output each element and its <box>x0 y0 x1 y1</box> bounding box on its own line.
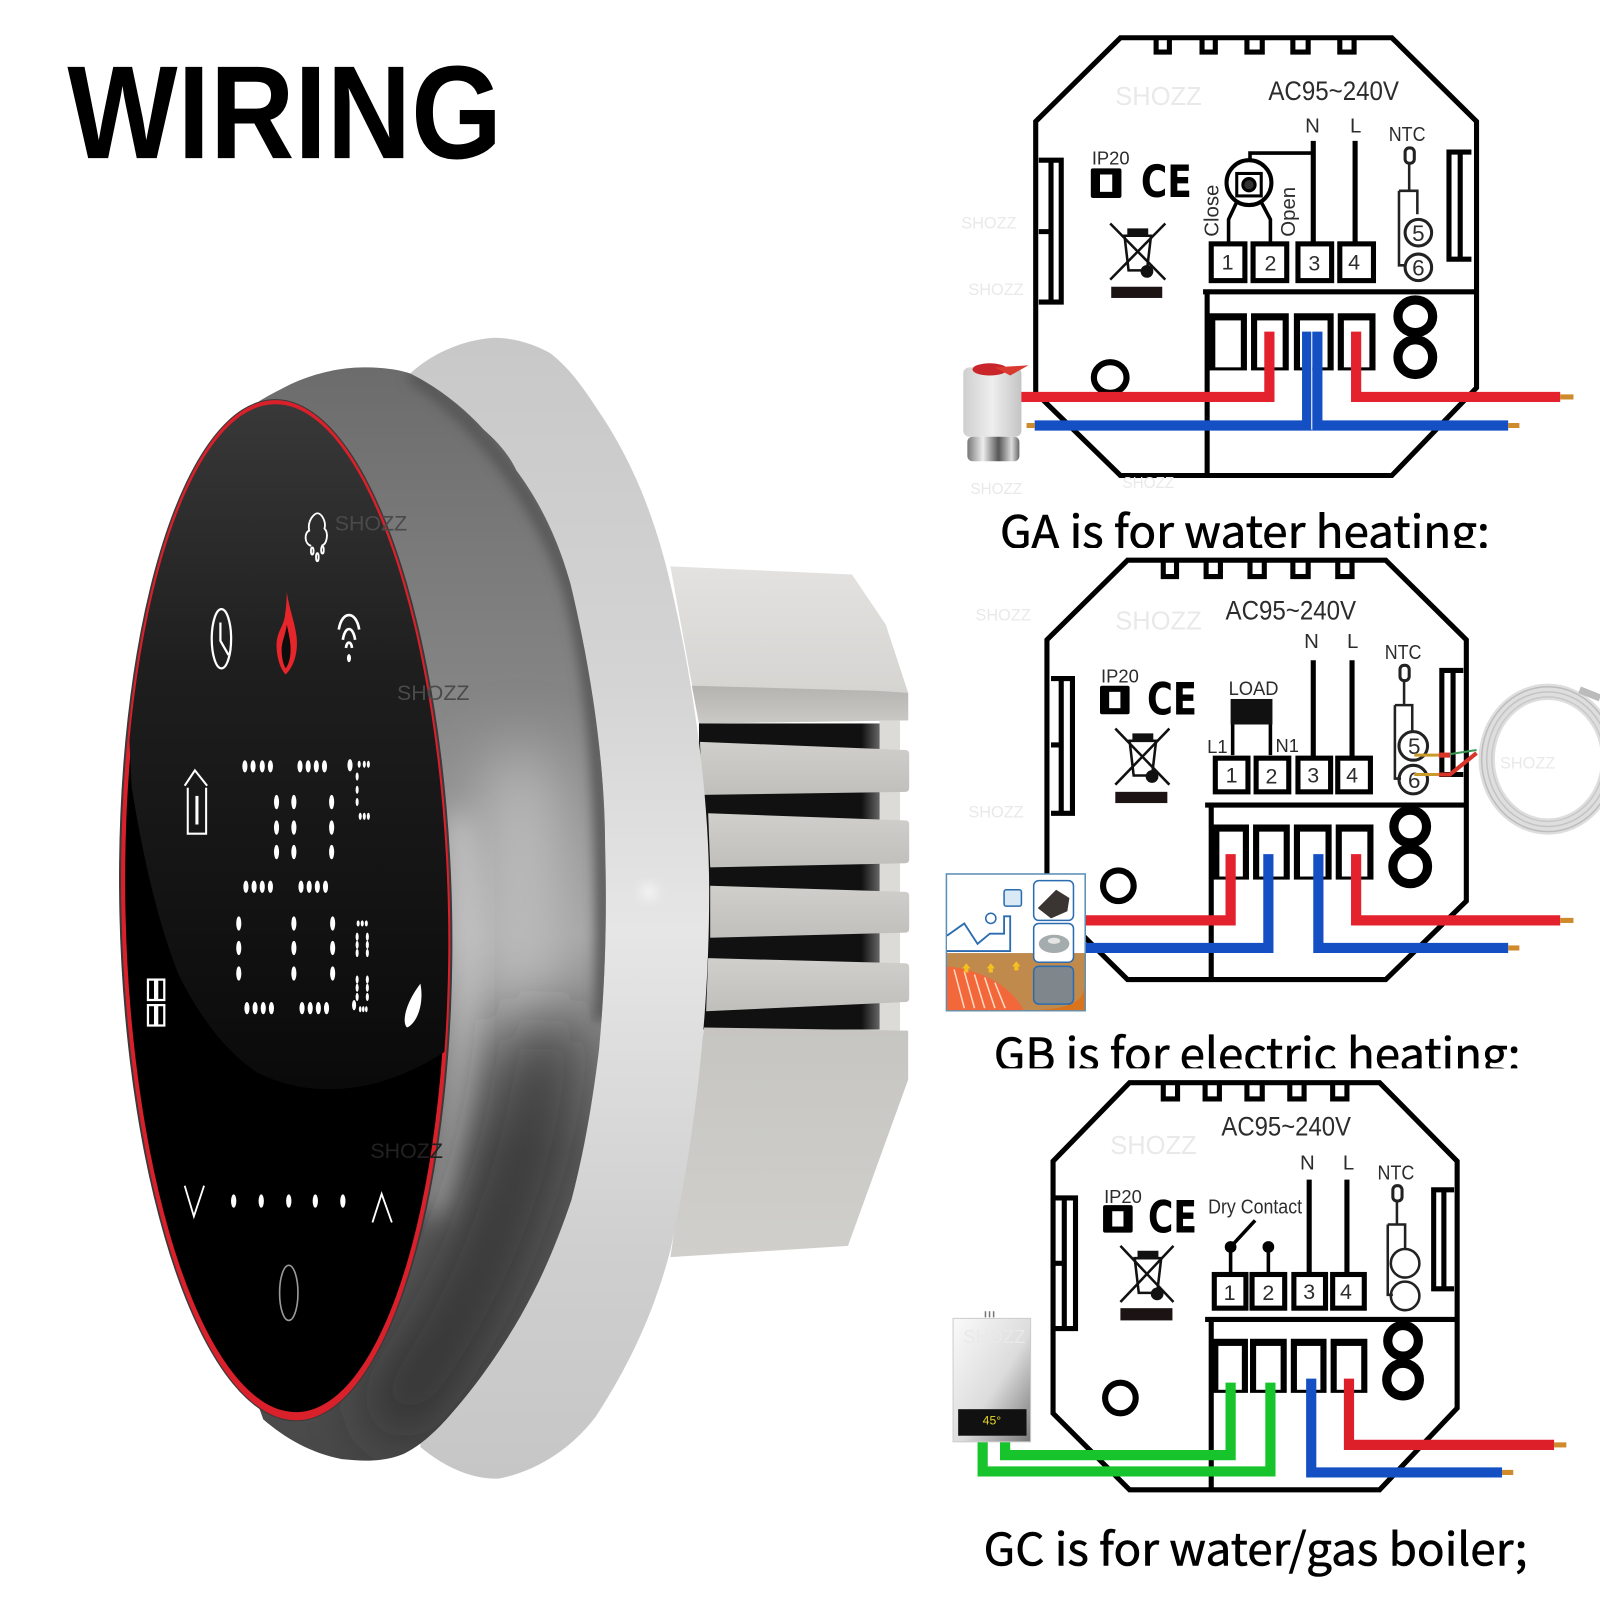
boiler <box>953 1311 1031 1442</box>
disposal bar <box>1120 1308 1172 1320</box>
disposal bar <box>1115 792 1167 803</box>
icon: home thermometer <box>185 770 207 834</box>
wiring diagram: GB electric heating <box>946 560 1600 1011</box>
left clip <box>1055 1198 1076 1329</box>
icon: WEEE bin <box>1120 1246 1173 1302</box>
double circle ports <box>1398 300 1433 374</box>
N L NTC labels <box>1305 116 1426 146</box>
double circle ports <box>1393 810 1428 884</box>
CE mark: CE <box>1148 1191 1197 1244</box>
board outline <box>1036 38 1477 476</box>
N L NTC labels: L <box>1347 631 1358 653</box>
L1 and N1 labels <box>1207 735 1299 757</box>
voltage label: AC95~240V <box>1221 1112 1351 1142</box>
CE mark: CE <box>1147 672 1197 725</box>
wires <box>983 1379 1566 1472</box>
left clip <box>1039 160 1061 302</box>
wiring diagram: GA water heating <box>961 38 1573 498</box>
N L NTC labels <box>1304 631 1421 664</box>
N L NTC labels: NTC <box>1378 1163 1414 1185</box>
board watermarks: SHOZZ <box>976 606 1031 624</box>
IP20 mark <box>1091 147 1130 198</box>
IP20 mark: IP20 <box>1101 666 1139 687</box>
icon: WEEE bin <box>1115 729 1169 785</box>
board watermarks <box>963 1132 1197 1347</box>
board watermarks <box>961 83 1202 498</box>
temperature digits <box>236 759 370 1014</box>
watermarks on device: SHOZZ <box>335 512 407 536</box>
wires <box>1019 327 1573 430</box>
mounting tabs <box>1163 562 1352 577</box>
N and L leads <box>1313 660 1352 756</box>
mounting hole <box>1094 362 1127 393</box>
control arrows and slider dots <box>185 1186 392 1222</box>
N L NTC labels: NTC <box>1389 124 1426 146</box>
board outline <box>1053 1083 1457 1490</box>
partition lines <box>1203 292 1477 476</box>
board watermarks: SHOZZ <box>1115 608 1202 636</box>
right clip <box>1449 152 1471 259</box>
boiler: 45° <box>983 1413 1001 1427</box>
mounting tabs <box>1163 1085 1347 1099</box>
probe numbers: 6 <box>1408 768 1421 793</box>
numbered terminals: 4 <box>1348 250 1360 274</box>
partition lines <box>1205 805 1465 980</box>
L1 and N1 labels: L1 <box>1207 736 1228 757</box>
probe numbers: 5 <box>1412 221 1425 246</box>
numbered terminals: 3 <box>1308 251 1320 275</box>
load label and element <box>1229 678 1279 755</box>
caption GC: GC is for water/gas boiler; <box>984 1513 1528 1578</box>
numbered terminals <box>1215 758 1370 792</box>
N L NTC labels: NTC <box>1385 642 1421 664</box>
mounting tabs <box>1156 40 1354 52</box>
icon: wifi <box>339 615 359 662</box>
caption GA: GA is for water heating: <box>1000 496 1490 561</box>
floor heating picture <box>946 874 1085 1011</box>
watermarks on device <box>335 512 469 1163</box>
board watermarks: SHOZZ <box>1115 83 1202 111</box>
icon: WEEE bin <box>1110 223 1165 280</box>
icon: cloud <box>306 513 327 561</box>
N L NTC labels: L <box>1343 1152 1354 1174</box>
NTC probe <box>1388 1186 1419 1310</box>
dry contact switch <box>1227 1220 1272 1273</box>
screw terminals <box>1212 1339 1367 1393</box>
white mounting flange <box>410 338 709 1479</box>
Dry Contact label: Dry Contact <box>1208 1196 1302 1218</box>
rear housing block <box>670 566 909 1257</box>
right clip <box>1434 1190 1454 1289</box>
caption GB: GB is for electric heating: <box>994 1018 1520 1083</box>
numbered terminals: 3 <box>1307 764 1319 788</box>
watermarks on device: SHOZZ <box>370 1139 443 1163</box>
L1 and N1 labels: N1 <box>1276 735 1299 756</box>
N and L leads <box>1309 1180 1347 1273</box>
N L NTC labels: L <box>1350 116 1361 138</box>
wires <box>1086 854 1573 948</box>
board watermarks: SHOZZ <box>968 803 1024 821</box>
partition lines <box>1205 1319 1457 1490</box>
icon: flame <box>277 592 297 674</box>
mounting hole <box>1105 1383 1136 1413</box>
double circle ports <box>1387 1326 1419 1396</box>
numbered terminals: 2 <box>1265 765 1277 789</box>
Close and Open labels: Open <box>1278 187 1300 237</box>
valve symbol <box>1227 153 1313 243</box>
IP20 mark <box>1100 666 1139 714</box>
probe numbers: 6 <box>1412 256 1425 281</box>
CE mark: CE <box>1141 155 1192 208</box>
numbered terminals: 1 <box>1224 1281 1236 1305</box>
NTC probe <box>1399 148 1432 281</box>
board watermarks <box>968 606 1555 821</box>
Close and Open labels: Close <box>1201 185 1223 237</box>
icon: eco leaf <box>405 984 421 1028</box>
icon: clock <box>212 609 231 668</box>
left clip <box>1051 679 1072 813</box>
Close and Open labels <box>1201 185 1300 237</box>
N L NTC labels: N <box>1305 116 1320 138</box>
screw terminals <box>1209 313 1376 370</box>
numbered terminals <box>1211 244 1373 281</box>
N L NTC labels <box>1300 1152 1414 1185</box>
silver bezel <box>258 367 606 1461</box>
board watermarks: SHOZZ <box>963 1326 1025 1347</box>
touch screen face <box>108 388 464 1425</box>
IP20 mark: IP20 <box>1092 147 1130 168</box>
board watermarks: SHOZZ <box>970 481 1022 498</box>
board watermarks: SHOZZ <box>1500 754 1555 772</box>
numbered terminals: 4 <box>1346 764 1358 788</box>
numbered terminals: 2 <box>1264 251 1276 275</box>
voltage label: AC95~240V <box>1268 76 1399 106</box>
numbered terminals: 3 <box>1303 1280 1315 1304</box>
load label and element: LOAD <box>1229 678 1279 700</box>
numbered terminals <box>1214 1274 1364 1308</box>
board outline <box>1047 560 1466 980</box>
probe numbers <box>1412 221 1425 281</box>
board watermarks: SHOZZ <box>1122 475 1174 492</box>
thermostat product photo <box>108 338 909 1479</box>
watermarks on device: SHOZZ <box>397 681 469 705</box>
N L NTC labels: N <box>1300 1152 1315 1174</box>
N and L leads <box>1313 141 1355 243</box>
disposal bar <box>1111 287 1162 298</box>
numbered terminals: 1 <box>1226 764 1238 788</box>
mounting hole <box>1103 870 1134 901</box>
numbered terminals: 4 <box>1340 1280 1352 1304</box>
IP20 mark: IP20 <box>1104 1186 1142 1207</box>
NTC probe <box>1395 665 1428 794</box>
board watermarks: SHOZZ <box>961 215 1017 233</box>
N L NTC labels: N <box>1304 631 1319 653</box>
board watermarks: SHOZZ <box>968 281 1024 299</box>
probe numbers: 5 <box>1408 734 1421 759</box>
board watermarks: SHOZZ <box>1110 1132 1197 1160</box>
right clip <box>1442 670 1463 774</box>
probe numbers <box>1408 734 1421 793</box>
numbered terminals: 1 <box>1222 250 1234 274</box>
actuator <box>963 363 1029 461</box>
numbered terminals: 2 <box>1262 1281 1274 1305</box>
IP20 mark <box>1103 1186 1142 1233</box>
sensor leads <box>1414 750 1477 774</box>
wiring diagram: GC water/gas boiler <box>953 1083 1566 1490</box>
power button <box>280 1265 298 1320</box>
sensor cable coil <box>1482 687 1600 832</box>
icon: segment menu <box>148 980 164 1026</box>
screw terminals <box>1213 824 1373 880</box>
title: WIRING <box>67 39 502 187</box>
voltage label: AC95~240V <box>1226 595 1356 625</box>
